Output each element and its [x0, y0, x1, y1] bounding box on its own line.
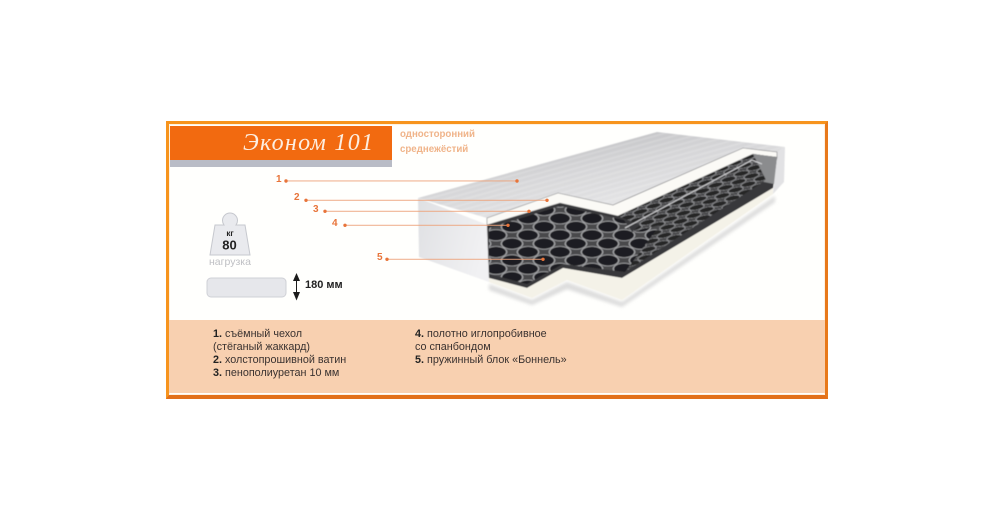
banner orange bar	[170, 126, 392, 160]
legend column 1	[213, 328, 346, 379]
callout 4	[343, 224, 510, 227]
back wall of the cut	[735, 154, 777, 184]
icon: weight: 80	[222, 238, 237, 252]
callout number 5: 5	[377, 252, 383, 263]
legend column 1: 1. съёмный чехол	[213, 328, 302, 340]
front spring rows	[489, 206, 660, 284]
legend column 2	[415, 328, 567, 366]
bottom shadow	[489, 196, 775, 307]
callout number 2: 2	[294, 192, 300, 203]
top quilted surface	[418, 132, 785, 218]
load label: нагрузка	[209, 256, 251, 268]
spring block highlight wire	[625, 160, 762, 228]
left front face	[418, 198, 489, 282]
firmness text	[400, 129, 475, 155]
callout 2	[304, 199, 549, 202]
callout number 4: 4	[332, 218, 338, 229]
legend column 1: 3. пенополиуретан 10 мм	[213, 367, 339, 379]
firmness text: среднежёстий	[400, 144, 468, 155]
legend column 1: 2. холстопрошивной ватин	[213, 354, 346, 366]
white foam cut band	[487, 148, 777, 225]
legend column 2: 5. пружинный блок «Боннель»	[415, 354, 567, 366]
mattress body	[418, 132, 785, 307]
rear spring rows	[600, 154, 766, 270]
icon: weight	[210, 213, 250, 255]
icon: height bar	[207, 278, 286, 297]
icon: weight: кг	[226, 229, 234, 238]
title banner	[170, 126, 392, 167]
callout 5	[385, 258, 545, 261]
callout lines	[284, 179, 549, 261]
legend column 2: 4. полотно иглопробивное	[415, 328, 547, 340]
icon: height arrow	[293, 273, 300, 300]
callout number 1: 1	[276, 174, 282, 185]
legend column 1: (стёганый жаккард)	[213, 341, 310, 353]
callout 3	[323, 210, 531, 213]
firmness text: односторонний	[400, 129, 475, 140]
panel: orange frame	[166, 121, 828, 399]
legend column 2: со спанбондом	[415, 341, 491, 353]
interior dark bed	[487, 154, 777, 288]
callout number 3: 3	[313, 204, 319, 215]
right side face	[773, 147, 785, 194]
height label: 180 мм	[305, 279, 343, 291]
callout 1	[284, 179, 519, 183]
bottom foam layers	[489, 188, 773, 300]
title: Эконом 101	[243, 130, 374, 156]
panel: legend	[169, 320, 825, 393]
